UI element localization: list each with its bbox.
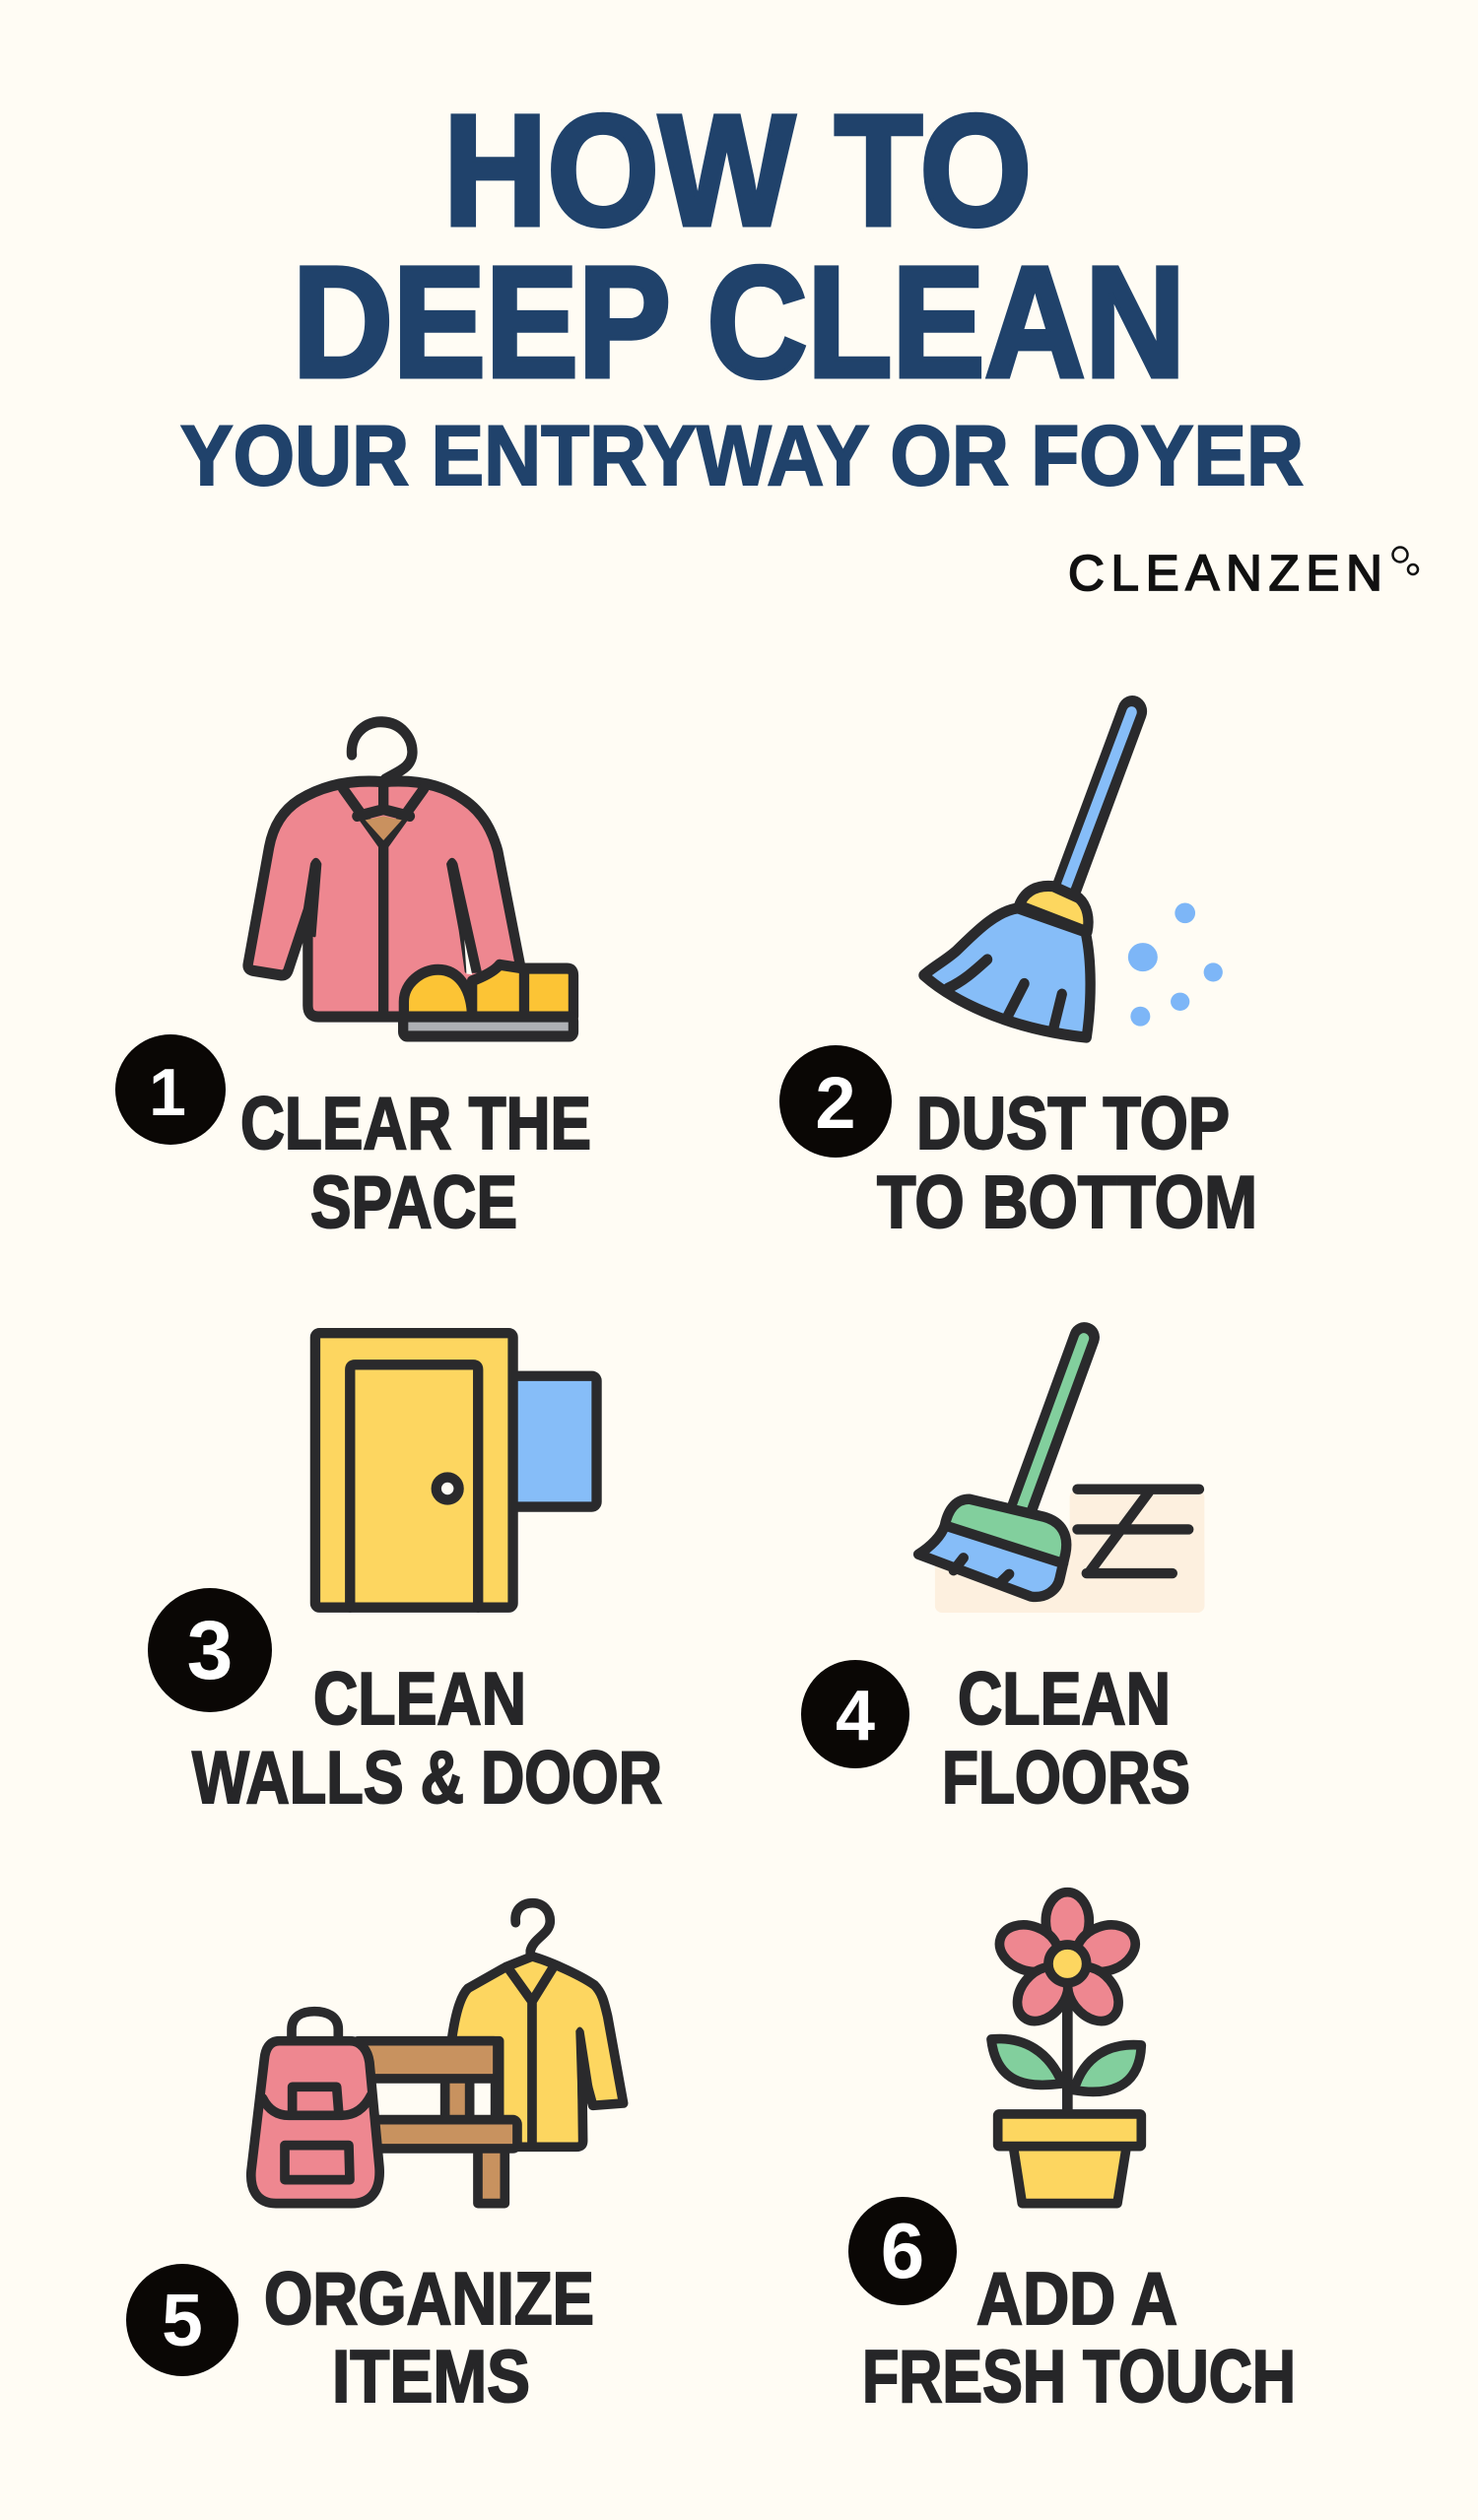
title — [293, 82, 1185, 410]
title: DEEP CLEAN — [293, 233, 1185, 410]
panel: step 3 clean walls and door — [148, 1333, 662, 1819]
number badge 2: 2 — [815, 1062, 856, 1144]
icon: sweeping broom on floor — [918, 1337, 1204, 1613]
number badge 5 — [126, 2264, 238, 2376]
label: organize items: ITEMS — [332, 2335, 530, 2418]
label: dust top to bottom: DUST TOP — [916, 1082, 1230, 1164]
logo: CleanZen: CLEANZEN — [1068, 545, 1382, 601]
number badge 3: 3 — [187, 1604, 233, 1696]
label: organize items: ORGANIZE — [264, 2257, 594, 2340]
number badge 6 — [848, 2197, 957, 2305]
number badge 1: 1 — [149, 1055, 186, 1130]
label: organize items — [264, 2257, 594, 2418]
number badge 2 — [779, 1045, 892, 1158]
label: clean walls and door — [192, 1657, 662, 1819]
number badge 6: 6 — [881, 2207, 924, 2294]
label: add a fresh touch: FRESH TOUCH — [862, 2335, 1296, 2418]
number badge 1 — [115, 1034, 226, 1145]
label: clear the space — [240, 1082, 591, 1243]
icon: door and window — [315, 1333, 597, 1608]
number badge 4: 4 — [836, 1677, 875, 1756]
panel: step 5 organize items — [126, 1903, 624, 2418]
panel: step 4 clean floors — [801, 1337, 1204, 1819]
title: HOW TO — [443, 82, 1032, 258]
icon: jacket on hanger with shoes — [248, 722, 573, 1036]
label: clean walls and door: CLEAN — [313, 1657, 526, 1740]
label: clear the space: SPACE — [310, 1161, 517, 1243]
label: add a fresh touch: ADD A — [976, 2257, 1177, 2340]
label: dust top to bottom: TO BOTTOM — [877, 1161, 1257, 1243]
label: clear the space: CLEAR THE — [240, 1082, 591, 1164]
number badge 4 — [801, 1660, 909, 1768]
panel: step 6 add a fresh touch — [848, 1892, 1296, 2418]
number badge 5: 5 — [162, 2279, 203, 2361]
label: clean walls and door: WALLS & DOOR — [192, 1736, 662, 1819]
panel: step 2 dust top to bottom — [779, 711, 1257, 1243]
number badge 3 — [148, 1588, 272, 1712]
icon: potted flower — [991, 1892, 1142, 2204]
icon: broom with dust — [923, 711, 1223, 1037]
panel: step 1 clear the space — [115, 722, 591, 1243]
label: dust top to bottom — [877, 1082, 1257, 1243]
label: clean floors: FLOORS — [942, 1736, 1190, 1819]
subtitle: YOUR ENTRYWAY OR FOYER — [180, 409, 1304, 503]
icon: backpack, bench and coat — [251, 1903, 624, 2204]
label: clean floors — [942, 1657, 1190, 1819]
label: add a fresh touch — [862, 2257, 1296, 2418]
label: clean floors: CLEAN — [958, 1657, 1171, 1740]
